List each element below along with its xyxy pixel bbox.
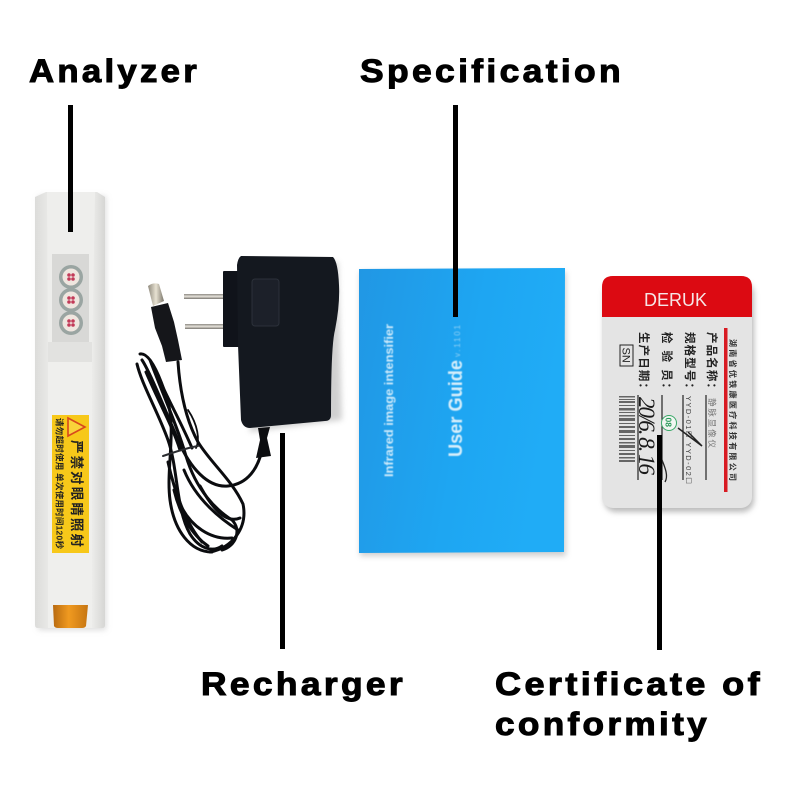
brand name: DERUK xyxy=(644,290,707,310)
specification booklet xyxy=(359,268,566,556)
card red header xyxy=(602,276,752,317)
booklet title: User Guide xyxy=(446,360,467,457)
adapter grip panel xyxy=(252,279,279,326)
recharger xyxy=(137,256,342,552)
field: product name: 产品名称： xyxy=(705,332,719,394)
LED shadow ledge xyxy=(48,342,92,362)
heading: Certificate of conformity: Certificate of xyxy=(495,666,763,702)
booklet faint suffix: v.1101 xyxy=(453,324,462,357)
green stamp: 08 xyxy=(664,418,674,427)
LED cluster xyxy=(59,265,83,335)
leader line: certificate xyxy=(657,435,662,650)
field: product name value: 静脉显像仪 xyxy=(707,398,717,448)
warning triangle xyxy=(68,418,85,436)
certificate card xyxy=(602,276,754,512)
orange tip xyxy=(53,605,88,628)
heading: Certificate of conformity: conformity xyxy=(495,706,710,742)
field rules xyxy=(638,395,706,480)
field: date: 生产日期： xyxy=(637,332,651,394)
card body xyxy=(602,276,752,508)
warning text main: 严禁对眼睛照射 xyxy=(69,440,85,548)
red rule xyxy=(724,328,728,492)
yellow warning label xyxy=(52,415,89,553)
green stamp xyxy=(662,416,676,430)
field: model value: YYD-01☐ YYD-02☐ xyxy=(684,396,693,484)
SN box: SN xyxy=(620,348,632,363)
prong base xyxy=(223,271,240,347)
strain relief xyxy=(256,427,271,458)
SN box xyxy=(620,345,633,366)
analyzer body xyxy=(35,192,105,628)
heading: Recharger: Recharger xyxy=(201,666,406,702)
analyzer upper facet xyxy=(47,192,95,360)
leader line: analyzer xyxy=(68,105,73,232)
heading: Analyzer: Analyzer xyxy=(29,53,200,89)
prongs xyxy=(184,294,224,329)
LED window xyxy=(52,254,89,342)
booklet cover xyxy=(359,268,565,553)
field: model: 规格型号： xyxy=(683,332,697,394)
signature stroke xyxy=(658,440,667,482)
company name: 湖南省优铁康医疗科技有限公司 xyxy=(728,339,738,481)
leader line: recharger xyxy=(280,433,285,649)
field: inspector: 检 验 员： xyxy=(660,332,674,394)
barcode xyxy=(619,396,635,462)
booklet subtitle: Infrared image intensifier xyxy=(384,323,396,477)
analyzer lower facet xyxy=(48,360,92,628)
handwritten date: 20/6. 8. 16 xyxy=(634,397,659,476)
heading: Specification: Specification xyxy=(360,53,624,89)
DC plug metal barrel xyxy=(148,283,164,306)
heading: Certificate of conformity xyxy=(495,666,763,742)
check mark xyxy=(678,428,702,446)
cable bundle xyxy=(137,354,262,552)
DC plug boot xyxy=(151,303,182,362)
warning text small: 请勿超时使用 单次使用时间120秒 xyxy=(54,418,64,549)
leader line: specification xyxy=(453,105,458,317)
adapter body xyxy=(237,256,339,428)
analyzer device xyxy=(35,192,106,630)
